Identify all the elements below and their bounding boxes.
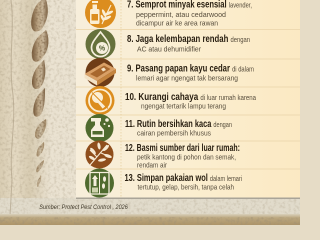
tip 11 text: cairan pembersih khusus [137, 128, 211, 138]
tip 10 text: 10. Kurangi cahaya di luar rumah karena [125, 92, 257, 103]
tip 7 text: peppermint, atau cedarwood [136, 10, 226, 19]
icon: glass cleaner spray [86, 114, 114, 142]
icon: humidity drop [86, 29, 116, 59]
cocoons: row of moth cocoons [31, 0, 48, 187]
icon: cedar boards [84, 58, 116, 87]
tip 8 text: 8. Jaga kelembapan rendah dengan [127, 34, 250, 45]
tip 10 text: ngengat tertarik lampu terang [141, 102, 226, 110]
tip 7 text [127, 0, 252, 28]
source note: Sumber: Protect Pest Control , 2026 [39, 204, 128, 211]
tip 9 text [127, 64, 254, 82]
tip 11 text: 11. Rutin bersihkan kaca dengan [125, 119, 232, 130]
icon: branch with leaves [86, 140, 114, 168]
tip 12 text: rendam air [137, 161, 167, 170]
icon: wardrobe [85, 168, 114, 198]
icon: spray bottle and herb [85, 0, 116, 28]
tip 8 text [127, 34, 250, 54]
tip 7 text: dicampur air ke area rawan [136, 18, 218, 28]
tip 12 text: petik kantong di pohon dan semak, [137, 153, 236, 162]
tip 12 text: 12. Basmi sumber dari luar rumah: [125, 143, 240, 154]
tip 9 text: lemari agar ngengat tak bersarang [136, 74, 238, 82]
tip 13 text: tertutup, gelap, bersih, tanpa celah [138, 182, 234, 192]
tip 13 text [124, 173, 242, 192]
tip 8 text: AC atau dehumidifier [137, 44, 201, 54]
panel: tips list [76, 0, 300, 199]
tip 13 text: 13. Simpan pakaian wol dalam lemari [124, 173, 242, 184]
icon: humidity drop: % [99, 46, 106, 52]
icon: crossed-out light bulb [86, 86, 114, 115]
tip 10 text [125, 92, 257, 110]
tip 11 text [125, 119, 232, 138]
tip 9 text: 9. Pasang papan kayu cedar di dalam [127, 64, 254, 74]
tip 12 text [125, 143, 240, 170]
